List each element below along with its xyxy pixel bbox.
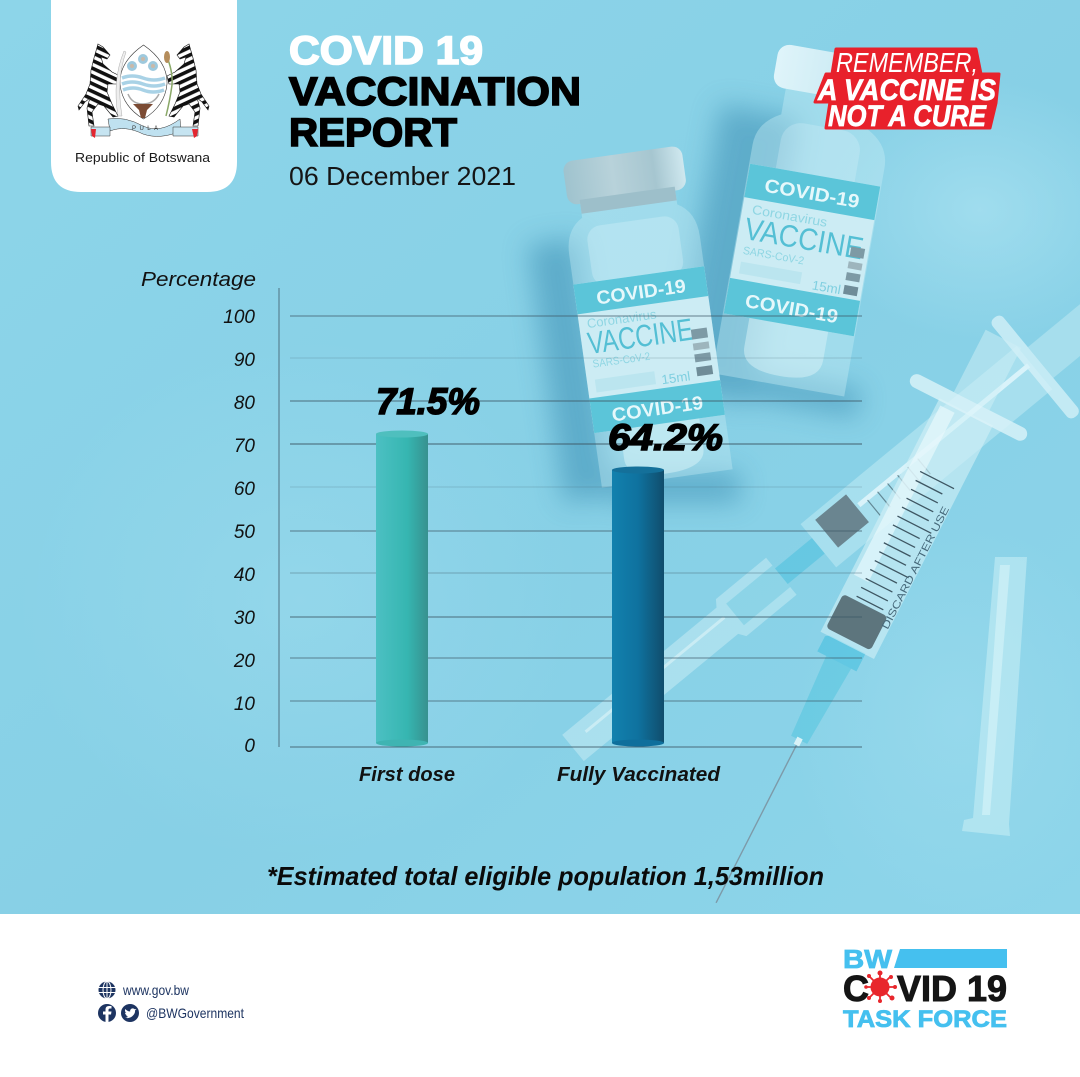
logo words: COVID 19: COVID 19 [843, 968, 1007, 1009]
value: first dose: 71.5% [376, 381, 480, 422]
callout: remember badge: REMEMBER, [836, 47, 978, 78]
contact details [98, 982, 244, 1022]
category label: fully vaccinated: Fully Vaccinated [557, 764, 721, 786]
footer panel [0, 914, 1080, 1077]
sorghum plant [166, 55, 172, 116]
y axis labels [223, 307, 255, 757]
social handle: @BWGovernment [146, 1005, 244, 1021]
callout: remember badge: NOT A CURE [828, 100, 987, 133]
vaccine vial, right: Coronavirus [751, 202, 829, 230]
syringe in front with needle [658, 309, 1061, 932]
gridlines [290, 316, 862, 747]
vaccine vial, left: 15ml [660, 368, 691, 387]
y axis labels: 50 [234, 522, 255, 543]
vaccine vial, left: VACCINE [585, 312, 695, 361]
y axis line [278, 288, 280, 747]
y axis labels: 90 [234, 350, 255, 371]
icon: facebook [98, 1004, 116, 1022]
shield [120, 45, 167, 119]
y axis labels: 100 [223, 307, 255, 328]
callout: remember badge [815, 47, 999, 133]
icon: twitter [121, 1004, 139, 1022]
value: fully vaccinated: 64.2% [608, 417, 723, 458]
title: REPORT [289, 111, 457, 155]
vaccine vial, left: SARS-CoV-2 [592, 351, 651, 371]
vaccine vial, left [556, 144, 733, 488]
y axis labels: 70 [234, 436, 255, 457]
coat of arms [78, 44, 209, 138]
category label: first dose: First dose [359, 764, 455, 786]
y axis labels: 10 [234, 694, 255, 715]
title: VACCINATION [289, 70, 581, 114]
vaccine vial, left: COVID-19 [611, 393, 705, 426]
vaccine vial, right: SARS-CoV-2 [742, 245, 805, 267]
title [289, 29, 581, 155]
zebra supporter, left [78, 44, 120, 126]
vaccine vial, right: 15ml [811, 277, 842, 297]
y axis labels: 60 [234, 479, 255, 500]
caption: Republic of Botswana [75, 151, 210, 165]
icon: virus [864, 970, 897, 1003]
footnote: *Estimated total eligible population 1,53million [267, 861, 824, 891]
logo word: BW: BW [843, 944, 893, 974]
task force logo [843, 944, 1007, 1033]
vaccine vial, left: COVID-19 [595, 276, 687, 309]
syringe in front with needle: DISCARD AFTER USE [880, 505, 952, 631]
vaccine vial, left: Coronavirus [586, 306, 658, 331]
icon: globe [98, 982, 116, 998]
logo words: task force: TASK FORCE [843, 1006, 1007, 1033]
title: COVID 19 [289, 29, 483, 73]
y axis labels: 0 [244, 736, 255, 757]
vaccine vial, right: COVID-19 [743, 291, 840, 328]
logo bar [894, 949, 1007, 968]
website: www.gov.bw [122, 982, 190, 998]
empty needle cap [962, 557, 1027, 836]
y axis labels: 40 [234, 565, 255, 586]
y axis labels: 30 [234, 608, 255, 629]
tusk [116, 51, 126, 116]
bar: fully vaccinated [612, 466, 664, 746]
bar: first dose [376, 430, 428, 746]
bar chart [141, 269, 862, 786]
vaccine vial, right: COVID-19 [763, 176, 861, 213]
vaccine vial, right [712, 41, 903, 397]
vaccine vial, right: VACCINE [742, 211, 866, 266]
callout: remember badge: A VACCINE IS [817, 74, 996, 107]
y axis labels: 80 [234, 393, 255, 414]
syringe behind with needle cap [532, 230, 1080, 797]
motto banner: PULA [132, 126, 158, 132]
y axis title: Percentage [141, 269, 256, 291]
y axis labels: 20 [233, 651, 255, 672]
logo panel [51, 0, 237, 192]
date: 06 December 2021 [289, 161, 516, 191]
zebra supporter, right [167, 44, 209, 126]
